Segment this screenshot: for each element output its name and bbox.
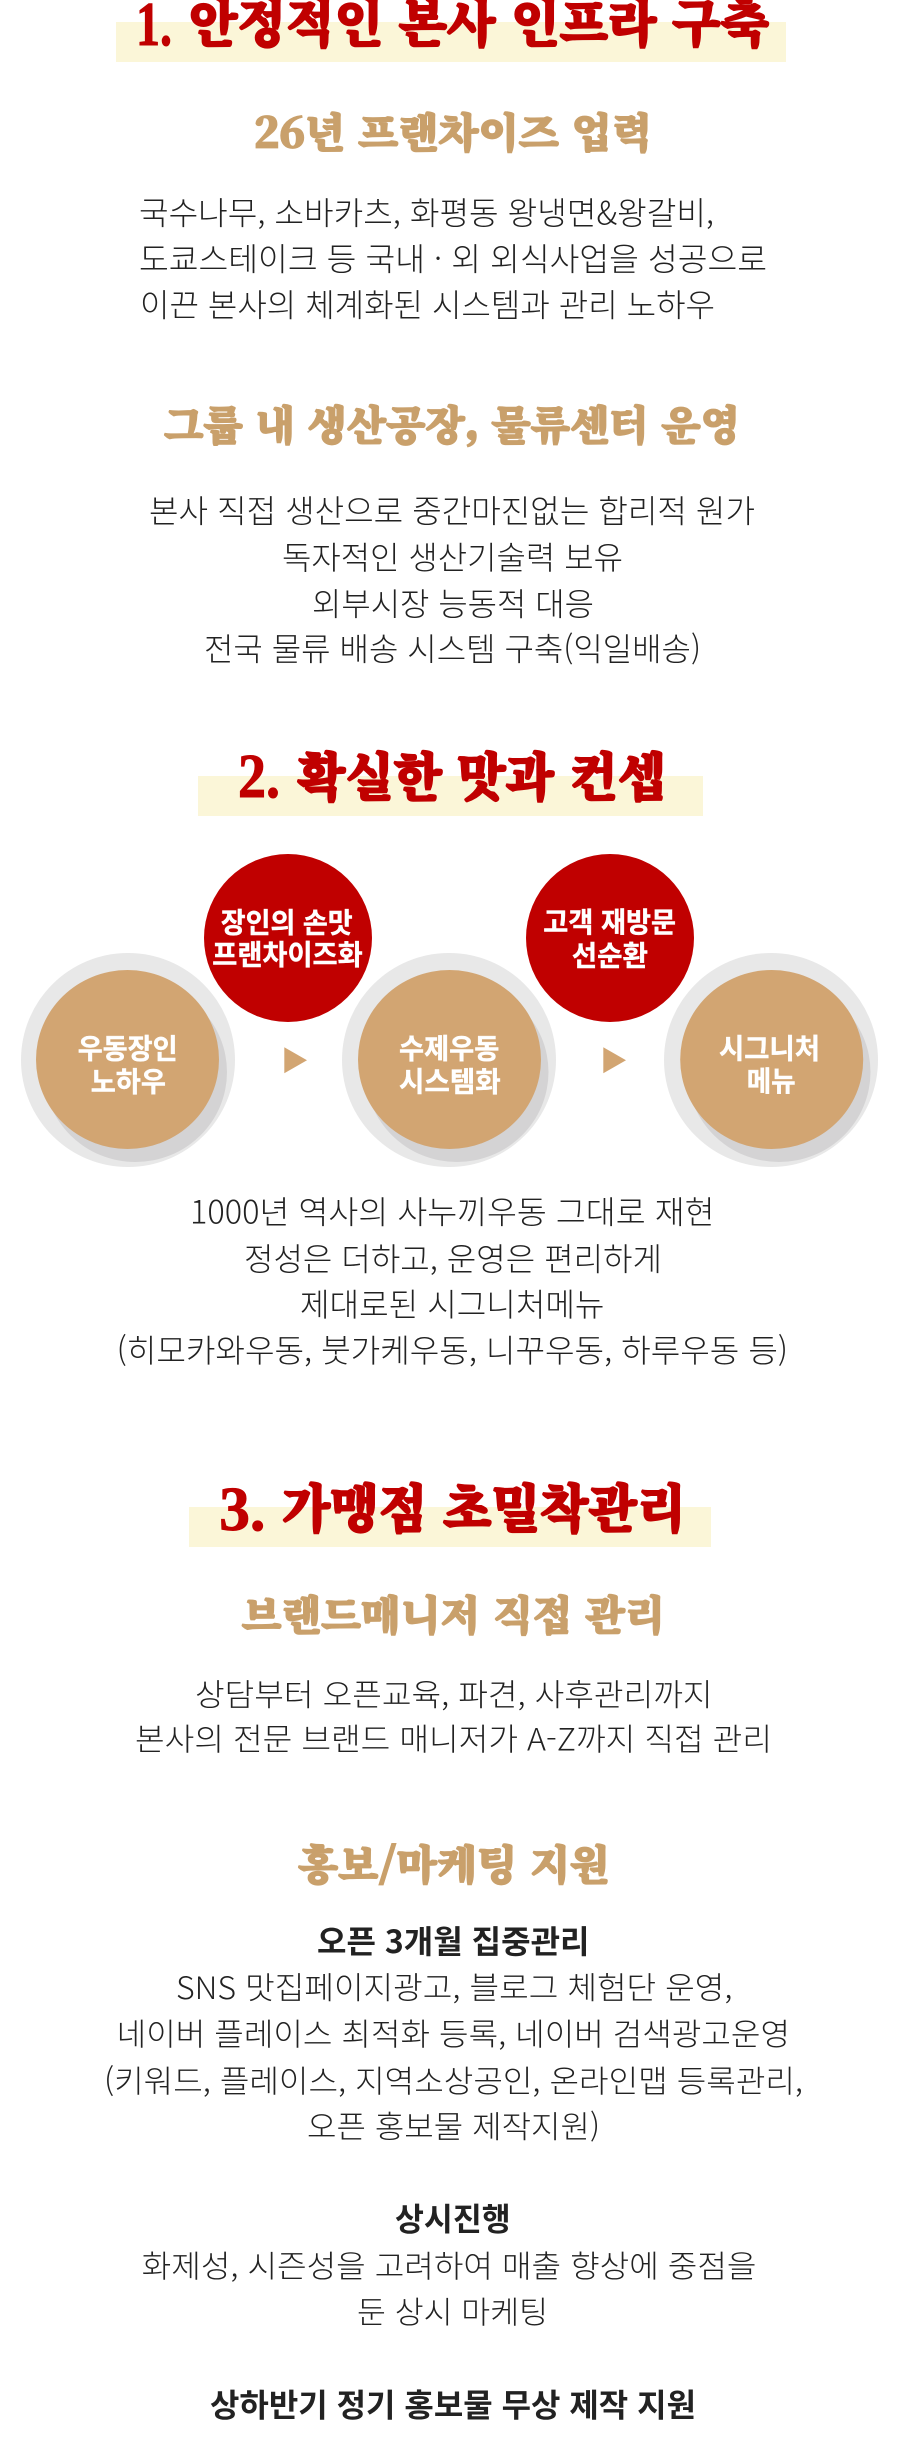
text block: signature menu description: 정성은 더하고, 운영은 편리하게 — [244, 1234, 662, 1280]
text block: production: 전국 물류 배송 시스템 구축(익일배송) — [204, 624, 701, 670]
circle: signature menu: 메뉴 — [747, 1060, 796, 1100]
section 2: taste and concept — [21, 736, 878, 1372]
text block: franchise experience: 국수나무, 소바카츠, 화평동 왕냉면&왕갈비, — [139, 188, 714, 234]
red circle: customer return cycle: 선순환 — [572, 934, 648, 974]
section 3 title: 3. — [219, 1476, 265, 1544]
text block: signature menu description — [117, 1188, 788, 1372]
text block: ongoing — [142, 2194, 756, 2332]
text block: half-year promo: 상하반기 정기 홍보물 무상 제작 지원 — [210, 2380, 696, 2426]
subheading: factory and logistics: 그룹 내 생산공장, 물류센터 운영 — [164, 393, 740, 452]
subheading: 26 years: 26년 프랜차이즈 업력 — [254, 100, 652, 160]
text block: open 3 months — [104, 1917, 803, 2147]
circle: handmade udon system — [342, 953, 556, 1167]
red circle: customer return cycle — [526, 854, 694, 1022]
section 3 title: 가맹점 초밀착관리 — [282, 1468, 686, 1542]
circle: signature menu: 시그니처 — [719, 1027, 820, 1067]
circle: signature menu — [664, 953, 878, 1167]
text block: production: 외부시장 능동적 대응 — [312, 580, 594, 626]
text block: open 3 months: (키워드, 플레이스, 지역소상공인, 온라인맵 등록관리, — [104, 2056, 803, 2102]
text block: signature menu description: 1000년 역사의 사누끼우동 그대로 재현 — [190, 1188, 714, 1234]
text block: franchise experience: 이끈 본사의 체계화된 시스템과 관리 노하우 — [140, 280, 715, 326]
circle: udon master know-how — [21, 953, 235, 1167]
text block: franchise experience — [139, 188, 767, 326]
text block: open 3 months: SNS 맛집페이지광고, 블로그 체험단 운영, — [176, 1963, 732, 2008]
text block: open 3 months: 오픈 3개월 집중관리 — [317, 1917, 590, 1963]
text block: open 3 months: 오픈 홍보물 제작지원) — [307, 2102, 600, 2147]
text block: signature menu description: 제대로된 시그니처메뉴 — [300, 1280, 604, 1326]
heading highlight band — [189, 1507, 711, 1547]
circle: udon master know-how: 우동장인 — [78, 1027, 178, 1067]
section 3: franchise management — [104, 1468, 803, 2426]
heading highlight band — [198, 776, 703, 816]
heading highlight band — [116, 22, 786, 62]
text block: ongoing: 상시진행 — [395, 2194, 511, 2240]
arrow 1 — [284, 1047, 307, 1073]
red circle: master taste franchised: 프랜차이즈화 — [212, 933, 363, 973]
text block: brand manager: 상담부터 오픈교육, 파견, 사후관리까지 — [195, 1670, 712, 1715]
arrow 2 — [603, 1047, 626, 1073]
circle: udon master know-how: 노하우 — [91, 1061, 166, 1101]
text block: brand manager — [135, 1670, 772, 1760]
red circle: customer return cycle: 고객 재방문 — [543, 901, 676, 941]
text block: production — [149, 486, 755, 670]
section 2 title: 확실한 맛과 컨셉 — [297, 736, 666, 811]
text block: ongoing: 화제성, 시즌성을 고려하여 매출 향상에 중점을 — [142, 2242, 756, 2286]
text block: brand manager: 본사의 전문 브랜드 매니저가 A-Z까지 직접 관리 — [135, 1714, 772, 1760]
subheading: brand manager: 브랜드매니저 직접 관리 — [242, 1583, 665, 1642]
section 2 title: 2. — [238, 743, 280, 811]
text block: open 3 months: 네이버 플레이스 최적화 등록, 네이버 검색광고운영 — [117, 2010, 790, 2054]
section 1: headquarters infrastructure — [116, 0, 786, 670]
text block: production: 본사 직접 생산으로 중간마진없는 합리적 원가 — [149, 486, 755, 532]
text block: production: 독자적인 생산기술력 보유 — [282, 533, 623, 579]
red circle: master taste franchised: 장인의 손맛 — [221, 902, 353, 942]
text block: ongoing: 둔 상시 마케팅 — [357, 2288, 548, 2332]
subheading: marketing: 홍보/마케팅 지원 — [298, 1833, 610, 1892]
red circle: master taste franchised — [204, 854, 372, 1022]
circle: handmade udon system: 시스템화 — [399, 1061, 501, 1101]
circle: handmade udon system: 수제우동 — [399, 1027, 499, 1067]
text block: signature menu description: (히모카와우동, 붓가케우동, 니꾸우동, 하루우동 등) — [117, 1326, 788, 1372]
text block: franchise experience: 도쿄스테이크 등 국내 · 외 외식사업을 성공으로 — [139, 234, 767, 280]
